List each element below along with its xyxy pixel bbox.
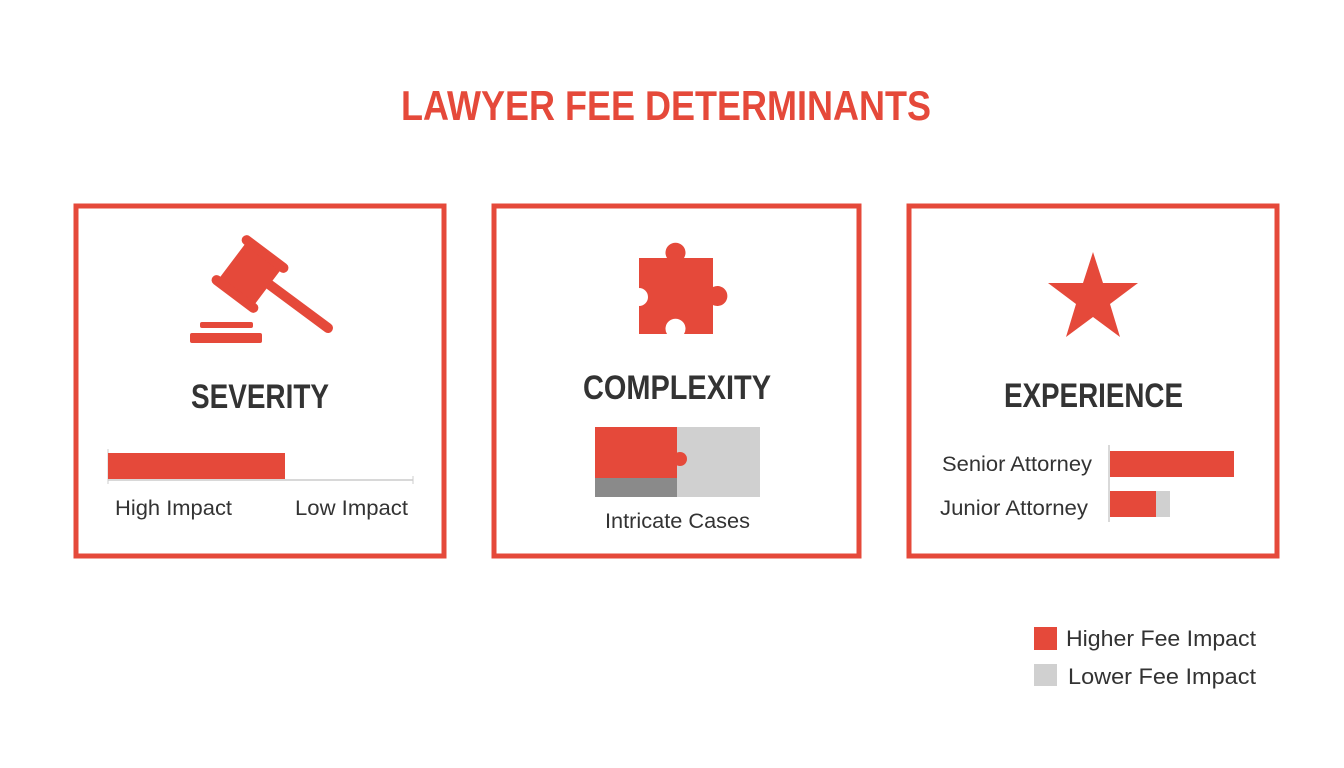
bar chart: severity xyxy=(108,449,413,520)
icon: star xyxy=(1048,252,1138,337)
panel: complexity xyxy=(494,206,859,556)
bar chart: severity: Low Impact xyxy=(295,497,408,520)
heading: severity: SEVERITY xyxy=(191,378,329,416)
legend xyxy=(1034,626,1256,689)
panel: experience xyxy=(909,206,1277,556)
bar chart: experience: Senior Attorney xyxy=(942,453,1093,476)
title: LAWYER FEE DETERMINANTS xyxy=(401,82,931,129)
icon: puzzle piece xyxy=(639,243,727,334)
bar chart: experience: Junior Attorney xyxy=(940,497,1089,520)
legend: Lower Fee Impact xyxy=(1068,664,1256,689)
panel: severity xyxy=(76,206,444,556)
chart: complexity block xyxy=(595,427,760,533)
legend: Higher Fee Impact xyxy=(1066,626,1256,651)
heading: experience: EXPERIENCE xyxy=(1004,377,1183,415)
bar chart: severity: High Impact xyxy=(115,497,232,520)
bar chart: experience xyxy=(940,445,1234,522)
heading: complexity: COMPLEXITY xyxy=(583,369,771,407)
icon: gavel xyxy=(190,233,328,343)
chart: complexity block: Intricate Cases xyxy=(605,510,750,533)
